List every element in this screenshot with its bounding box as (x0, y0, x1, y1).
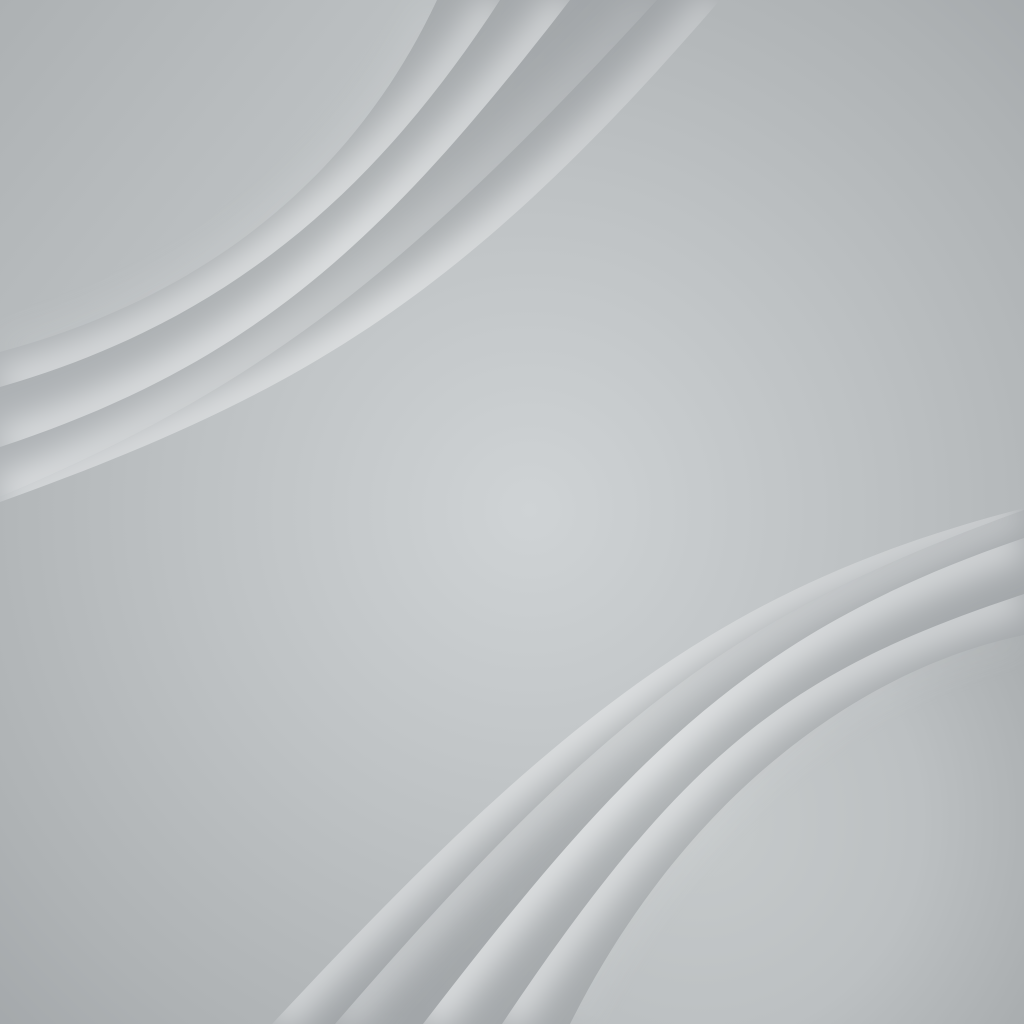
bottom-right band 2 (502, 594, 1024, 1024)
top-left band 2 (0, 0, 500, 387)
top-left band 3 (0, 0, 570, 447)
bottom-right band 5 (274, 512, 1013, 1024)
bottom-right band 4 (336, 512, 1020, 1024)
bottom-right inner panel (570, 640, 1024, 1024)
bottom-right band 3 (423, 538, 1024, 1024)
top-left band 4 (16, 2, 644, 476)
top-left band 5 (0, 0, 710, 502)
top-left inner panel (0, 0, 437, 350)
